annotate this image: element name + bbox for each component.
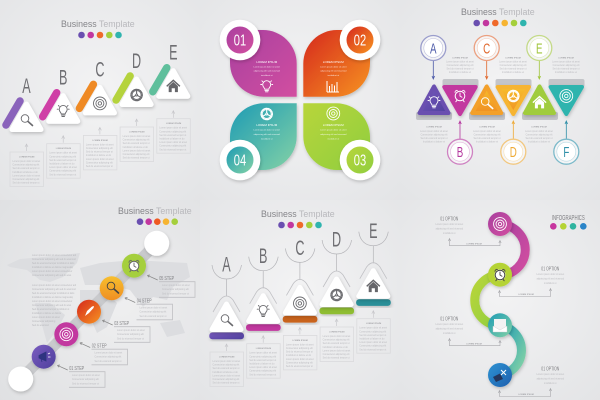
map text block: Lorem ipsum dolor sit amet [32,316,60,319]
petal 01: adipiscing elit sed eiusmod [254,70,281,72]
petal 02: Lorem ipsum dolor sit amet [320,66,347,68]
petal 03 [303,103,380,180]
step 03 circle [77,300,101,324]
callout C: C [483,40,490,57]
step C: LOREM IPSUM [292,340,308,342]
callout B: B [457,144,463,161]
step D: Lorem ipsum dolor sit amet [123,135,151,138]
gray tabs [416,79,584,120]
heading: Business Template [118,206,192,216]
option 2: adipiscing elit sed eiusmod [537,278,565,280]
petal 04 [220,103,297,180]
map text block: Consectetur adipiscing elit sed do eiusmod [32,258,76,261]
step B: Consectetur adipiscing elit [49,155,76,158]
step E: Incididunt ut labore et do [159,138,185,141]
text blocks: Lorem ipsum dolor sit amet [552,60,580,64]
callout B [448,121,472,164]
option 3: incididunt ut [443,332,456,335]
text blocks: Incididunt ut labore et [528,140,550,144]
petal 01: incididunt ut [261,74,273,77]
step E [153,40,190,153]
step B: Lorem ipsum dolor sit amet [49,166,77,169]
step 04 label: Consectetur adipiscing elit [140,310,167,314]
triangle B [444,87,476,114]
step C: Sed do eiusmod tempor ut [86,151,113,154]
heading: Business Template [261,209,335,219]
step E: Consectetur adipiscing elit [359,330,386,333]
option 3: Lorem ipsum dolor sit amet [435,323,464,326]
node: tools [488,363,512,387]
step C: Incididunt ut labore et do [286,354,312,357]
step A: Consectetur adipiscing elit [212,378,240,381]
step D: Sed do eiusmod tempor ut [123,142,150,145]
step D: Incididunt ut labore et do [323,346,348,349]
option 2: LOREM IPSUM [518,294,534,296]
step 03 label: 03 STEP [114,321,130,327]
text blocks: Sed do eiusmod tempor ut [421,137,448,140]
step B: Lorem ipsum dolor sit amet [49,152,77,155]
step C: Sed do eiusmod tempor ut [286,365,313,368]
step A: Lorem ipsum dolor sit amet [212,374,241,377]
text blocks: Lorem ipsum dolor sit amet [499,60,527,64]
step A: Lorem ipsum dolor sit amet [212,360,241,363]
callout E: E [536,40,543,57]
step C: C [95,57,104,81]
panel: alternating triangles A to F [416,7,584,164]
step C: Consectetur adipiscing elit [286,361,313,364]
step 02 label: Lorem ipsum dolor sit amet [94,352,123,354]
step 03 label [102,320,150,342]
petal 04: adipiscing elit sed eiusmod [254,133,281,136]
text blocks: LOREM IPSUM [558,58,574,60]
step A: Incididunt ut labore et do [212,371,238,374]
step B: LOREM IPSUM [56,148,71,150]
step 05 label: Sed do eiusmod tempor ut [162,292,189,296]
step 01 label: Consectetur adipiscing elit [72,378,99,381]
text blocks: Incididunt ut labore et [555,71,577,74]
step D: Consectetur adipiscing elit [323,339,350,342]
step C: Consectetur adipiscing elit [86,161,113,164]
step D: LOREM IPSUM [129,132,145,134]
colour dots [78,32,122,38]
petal 01: Lorem ipsum dolor sit amet [254,66,280,68]
text blocks: Consectetur adipiscing elit [500,64,527,67]
panel: four petals [220,20,380,180]
step B: Consectetur adipiscing elit [49,170,76,173]
step D: Lorem ipsum dolor sit amet [123,149,151,152]
callout F: F [563,144,569,161]
option 3: LOREM IPSUM [466,344,482,346]
step C: LOREM IPSUM [92,140,108,142]
panel: rising triangles A to E [6,19,190,186]
step A: LOREM IPSUM [19,156,35,158]
end circles [8,231,169,392]
petal 03: incididunt ut [327,138,340,140]
option 4: LOREM IPSUM [518,394,534,396]
step E: Sed do eiusmod tempor ut [159,134,187,137]
step 03 label: Consectetur adipiscing elit [117,333,144,336]
step B: B [259,244,267,268]
step A [209,252,244,386]
step C: Sed do eiusmod tempor ut [86,165,113,168]
step E: Sed do eiusmod tempor ut [159,148,187,151]
text blocks: Sed do eiusmod tempor ut [474,137,501,140]
step D: Incididunt ut labore et do [123,146,148,149]
world map [7,253,190,343]
option 4: 01 OPTION [541,366,560,372]
colour dots [473,20,527,26]
callout F [554,121,579,164]
colour dots [550,223,587,230]
step C: Lorem ipsum dolor sit amet [86,158,114,161]
text blocks: Consectetur adipiscing elit [421,134,448,136]
option 3: 01 OPTION [440,316,459,322]
step A: A [22,74,31,98]
text blocks: Lorem ipsum dolor sit amet [525,130,553,133]
text blocks: LOREM IPSUM [479,126,495,128]
option 1: LOREM IPSUM [466,244,482,246]
triangle A [420,86,448,113]
map text block: Consectetur adipiscing elit sed do eius [32,304,72,307]
step 05 circle [122,254,146,278]
petal 02: 02 [354,32,366,49]
text blocks: Consectetur adipiscing elit [526,134,553,136]
petal 02 [303,20,380,97]
text blocks: Sed do eiusmod tempor ut [500,68,527,70]
heading: Business Template [61,19,135,29]
option 2: 01 OPTION [541,266,560,272]
step A: Incididunt ut labore et do [12,171,38,174]
diagonal band [21,243,157,379]
option 1: incididunt ut [443,232,456,235]
text blocks: Sed do eiusmod tempor ut [526,137,553,140]
map text block: Consectetur adipiscing elit sed do eiusmod [32,288,76,291]
step A: A [222,252,231,276]
text blocks [420,58,580,144]
step 04 label: Lorem ipsum dolor sit amet [140,306,168,310]
step 05 label: 05 STEP [159,276,175,282]
triangle F [551,87,582,114]
step 03 label: Sed do eiusmod tempor ut [117,338,144,340]
petal 04: 04 [234,152,247,169]
step B: Incididunt ut labore et do [249,363,275,366]
text blocks: LOREM IPSUM [452,58,468,60]
option 2 [498,266,565,296]
text blocks: Lorem ipsum dolor sit amet [446,60,474,64]
text blocks: Sed do eiusmod tempor ut [447,68,474,70]
step C: Consectetur adipiscing elit [86,147,113,150]
petal 03: Lorem ipsum dolor sit amet [320,128,347,132]
text blocks: Incididunt ut labore et [502,71,524,74]
step B: Sed do eiusmod tempor ut [49,159,77,162]
step 04 label: Sed do eiusmod tempor ut [140,315,167,318]
step D: Consectetur adipiscing elit [123,139,150,142]
step 04 label: 04 STEP [137,298,152,304]
step E: Lorem ipsum dolor sit amet [159,127,187,130]
node: target [488,212,512,236]
text blocks: Consectetur adipiscing elit [474,134,501,136]
step E [356,219,391,353]
map text block: Consectetur adipiscing [32,320,56,323]
map text block: Consectetur adipiscing elit sed do eius [32,274,72,277]
map text block: Incididunt ut labore et dolore [32,312,62,315]
petal 04: LOREM IPSUM [256,123,278,127]
petal 01: 01 [234,32,246,49]
step 02 label: Sed do eiusmod tempor ut [94,360,122,363]
option 1: adipiscing elit sed eiusmod [436,228,464,230]
option 2: incididunt ut [544,282,557,285]
petal 03: LOREM IPSUM [323,123,344,127]
triangle C [472,86,501,113]
callout A: A [430,40,437,57]
map text block: Sed do eiusmod tempor incididunt ut [32,308,70,311]
step B: Lorem ipsum dolor sit amet [249,366,277,369]
step E: Lorem ipsum dolor sit amet [359,341,387,344]
step 02 label: Consectetur adipiscing elit [94,356,122,358]
step 04 label [125,298,172,320]
icon: bar chart [327,81,339,92]
step E: Consectetur adipiscing elit [359,345,386,348]
step 05 label: Lorem ipsum dolor sit amet [162,284,190,287]
step 01 label: Lorem ipsum dolor sit amet [72,374,100,377]
callout D: D [510,144,517,161]
step A: Lorem ipsum dolor sit amet [12,160,41,163]
petal 04: Lorem ipsum dolor sit amet [254,128,280,132]
step A: Consectetur adipiscing elit [12,178,40,181]
step 04 circle [100,276,124,300]
step C: Consectetur adipiscing elit [286,347,313,350]
option 4 [498,366,565,396]
step D: Sed do eiusmod tempor ut [123,157,150,160]
option 2: Lorem ipsum dolor sit amet [536,273,565,276]
step A: Consectetur adipiscing elit [12,164,40,167]
step E: Lorem ipsum dolor sit amet [159,141,187,144]
option 1: 01 OPTION [440,216,459,222]
step B: Sed do eiusmod tempor ut [249,373,277,376]
step E: LOREM IPSUM [366,323,381,325]
step B: B [59,65,67,90]
step D: Lorem ipsum dolor sit amet [323,349,351,352]
map text block: Incididunt ut labore et dolore magna aliq [32,266,74,269]
triangle E [525,86,554,113]
step B [246,244,281,378]
step 02 label: 02 STEP [92,344,107,350]
petal 04: incididunt ut [261,138,273,140]
step A: Sed do eiusmod tempor ut [212,382,240,385]
callout E [527,36,552,79]
step 05 label: Consectetur adipiscing elit [162,288,189,291]
step C: Sed do eiusmod tempor ut [286,351,313,354]
step A: Lorem ipsum dolor sit amet [12,174,41,177]
petal 01 [220,20,297,97]
option 4: adipiscing elit sed eiusmod [537,378,565,380]
step B: Lorem ipsum dolor sit amet [249,352,277,355]
petal 02: adipiscing elit sed eiusmod [320,70,347,72]
step C [283,235,317,370]
step D: Consectetur adipiscing elit [323,353,350,356]
map text block: Sed do eiusmod tempor incididunt ut labo [32,262,75,265]
map text block: Lorem ipsum dolor sit amet consectetur adi [32,254,76,257]
option 3: adipiscing elit sed eiusmod [436,328,464,330]
step E: Sed do eiusmod tempor ut [359,334,387,337]
petal 01: LOREM IPSUM [256,60,278,64]
petal 02: LOREM IPSUM [323,60,344,64]
step E: Incididunt ut labore et do [359,338,385,341]
petal 03: adipiscing elit sed eiusmod [320,133,347,136]
step E: LOREM IPSUM [166,123,181,125]
colour dots [278,222,322,228]
petal 03: 03 [354,152,366,169]
step C: Incididunt ut labore et do [86,154,112,157]
option 4: incididunt ut [544,382,557,385]
step D [116,49,154,162]
text blocks: Lorem ipsum dolor sit amet [473,130,501,133]
step D [319,227,354,362]
text blocks: Consectetur adipiscing elit [447,64,474,67]
panel: serpentine timeline [435,212,587,396]
step A: Sed do eiusmod tempor ut [12,182,40,185]
step 02 label [80,342,128,365]
option 1 [435,216,501,246]
step E: E [169,40,178,65]
step A [6,74,44,186]
option 1: Lorem ipsum dolor sit amet [435,223,464,226]
text blocks: Incididunt ut labore et [423,140,445,144]
step 01 label [57,365,105,387]
text blocks: LOREM IPSUM [531,126,547,128]
step 01 label: 01 STEP [69,366,85,372]
step A: Consectetur adipiscing elit [212,364,240,367]
step B: Sed do eiusmod tempor ut [249,359,277,362]
map text block: Sed do eiusmod tempor incididunt ut labo [32,292,75,295]
panel: diagonal steps on world map [7,206,195,392]
map text block: Incididunt ut labore et dolore magna aliq [32,296,74,299]
text blocks: Consectetur adipiscing elit [553,64,580,67]
panel: triangles with hooks A to E [209,209,391,386]
step B [43,65,80,178]
step D: Sed do eiusmod tempor ut [323,342,350,345]
triangle D [498,87,529,114]
step A: Sed do eiusmod tempor ut [212,367,240,370]
step B: Consectetur adipiscing elit [249,370,276,373]
colour dots [137,218,178,225]
step C: Lorem ipsum dolor sit amet [86,143,114,146]
step E: Consectetur adipiscing elit [159,145,186,148]
step 03 label: Lorem ipsum dolor sit amet [117,329,145,332]
step B: LOREM IPSUM [256,348,271,350]
step 05 label [147,275,195,297]
callout D [501,121,526,164]
step D: D [132,49,141,73]
step B: Sed do eiusmod tempor ut [49,173,77,176]
step E: E [369,219,378,243]
node: envelope [488,313,512,337]
step C: C [295,235,304,260]
step E: Consectetur adipiscing elit [159,130,186,133]
map text block [32,254,76,327]
step A: Sed do eiusmod tempor ut [12,167,40,170]
step 01 circle [32,345,56,369]
serpentine path [475,224,525,375]
text blocks: Incididunt ut labore et [449,71,471,74]
step D: Sed do eiusmod tempor ut [323,357,350,360]
step C: Lorem ipsum dolor sit amet [286,358,314,361]
step D: D [332,227,341,251]
step 02 circle [54,322,78,346]
callout C [474,36,499,79]
map text block: Lorem ipsum dolor sit amet consectetur adi [32,284,76,287]
node: clock [488,263,512,287]
text blocks: LOREM IPSUM [426,126,442,128]
step A: LOREM IPSUM [219,356,235,358]
text blocks: Sed do eiusmod tempor ut [553,68,580,70]
step B: Incididunt ut labore et do [49,163,75,166]
petal 02: incididunt ut [327,74,340,77]
step C: Lorem ipsum dolor sit amet [286,343,314,346]
step 01 label: Sed do eiusmod tempor ut [72,382,99,386]
step D: Consectetur adipiscing elit [123,153,150,156]
heading: Business Template [461,7,535,17]
text blocks: LOREM IPSUM [505,58,521,60]
step D: Lorem ipsum dolor sit amet [323,335,351,338]
step C [79,57,117,170]
step E: Sed do eiusmod tempor ut [359,348,387,351]
map text block: Lorem ipsum dolor sit amet consectetur [32,300,72,303]
option 4: Lorem ipsum dolor sit amet [536,373,565,376]
map text block: Sed do eiusmod [32,325,49,327]
text blocks: Lorem ipsum dolor sit amet [420,130,448,133]
map text block: Lorem ipsum dolor sit amet consectetur [32,270,72,273]
step B: Consectetur adipiscing elit [249,355,276,358]
step E: Lorem ipsum dolor sit amet [359,327,387,330]
option 3 [435,316,501,346]
step D: LOREM IPSUM [329,332,345,334]
callout A [421,36,446,79]
text blocks: Incididunt ut labore et [476,140,498,144]
